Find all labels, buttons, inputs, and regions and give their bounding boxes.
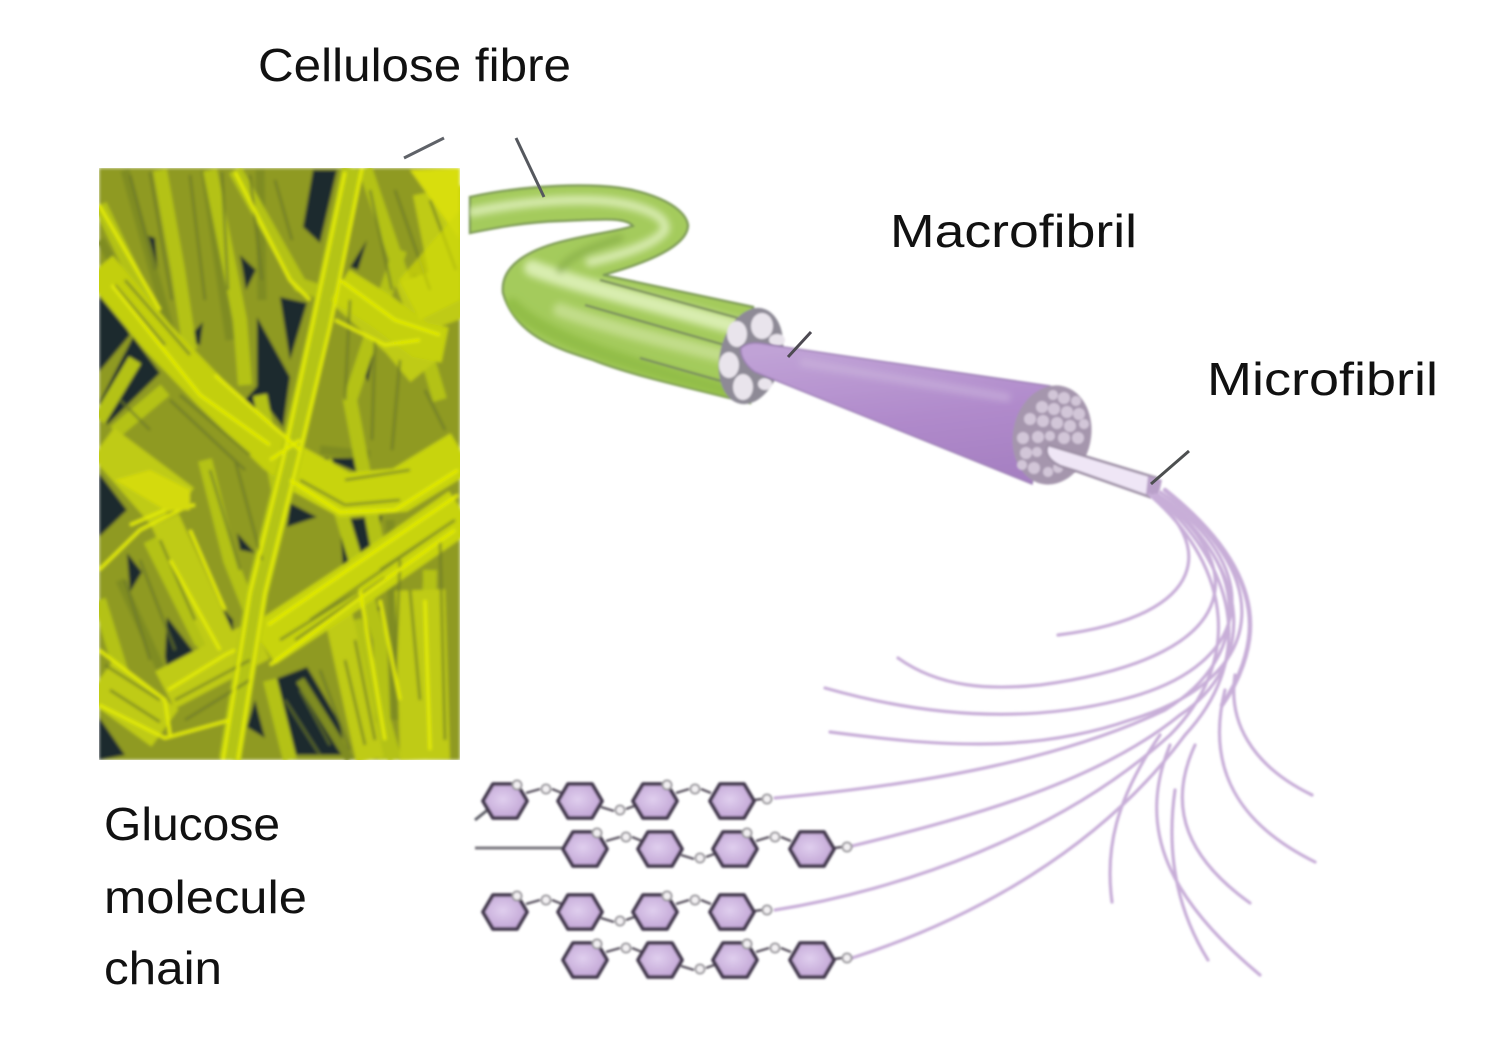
glucose chain row 1 [483,780,772,818]
pointer: microfibril [1151,451,1189,484]
label: Microfibril: Microfibril [1207,353,1438,405]
fibre shading and highlights [472,200,745,395]
bright edges [99,168,458,760]
macrofibril end cap with microfibrils [1003,378,1101,492]
glucose chain row 3 [483,892,772,929]
illustration: fanning cellulose threads [775,490,1315,975]
yellow-green fibres [99,168,440,760]
illustration: microfibril tube [1046,445,1162,498]
pointer: cellulose fibre left [404,138,444,158]
label: Glucose molecule chain [104,798,307,994]
pointer: cellulose fibre right [516,138,544,197]
olive thin strands [100,170,395,760]
label: Macrofibril: Macrofibril [890,205,1137,257]
glucose chain row 2 [563,828,852,866]
large bands [99,267,300,472]
illustration: purple macrofibril cone [741,343,1101,492]
illustration: glucose molecule chains [475,780,852,977]
label: Glucose molecule chain: chain [104,942,222,994]
fine dark texture strands [105,172,456,755]
label: Glucose molecule chain: molecule [104,871,307,923]
pointer: macrofibril [788,332,811,357]
label: Glucose molecule chain: Glucose [104,798,280,850]
glucose chain row 4 [563,940,852,977]
photo: micrograph of cellulose fibres [99,168,462,760]
label: Cellulose fibre: Cellulose fibre [258,39,571,91]
illustration: green cellulose fibre tube [470,185,793,411]
fibre end cap with macrofibrils [709,301,793,411]
